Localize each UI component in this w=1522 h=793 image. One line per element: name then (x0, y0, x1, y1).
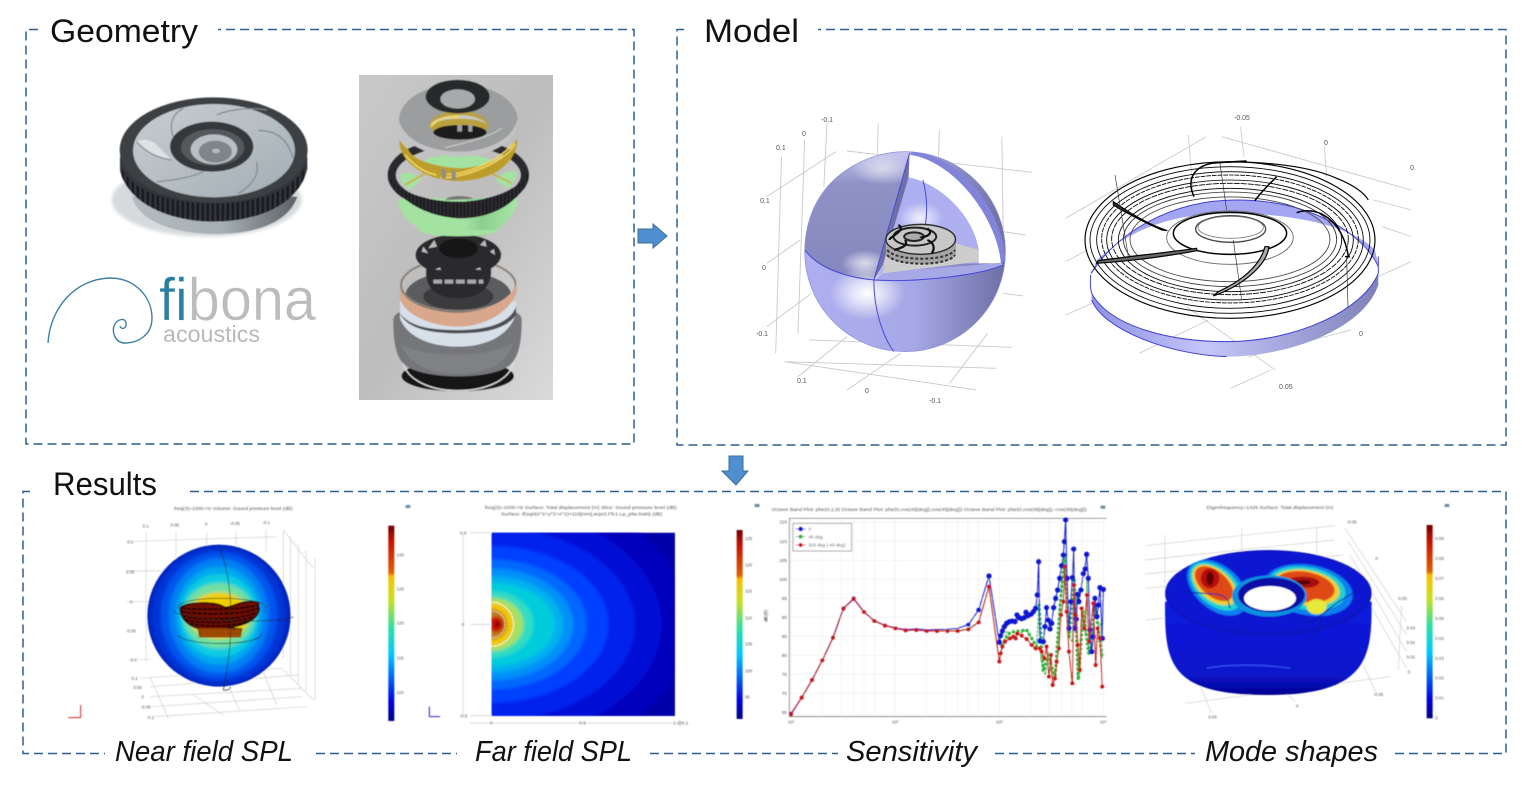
caption: sensitivity: Sensitivity (846, 736, 979, 768)
sensitivity y axis labels: 90 (782, 615, 787, 620)
mode shapes colorbar labels: 0.06 (1435, 596, 1444, 601)
sensitivity legend (793, 523, 852, 551)
chart: far field SPL (428, 503, 768, 726)
model: sphere axis labels: 0.1 (797, 378, 807, 385)
far field tick labels: 0.5 (460, 530, 467, 535)
far field title: freq(3)=1000 Hz Surface: Total displacement (m) Slice: Sound pressure level (dB) (485, 505, 677, 510)
far field axes (463, 533, 677, 723)
sensitivity x axis labels: 10² (892, 719, 899, 724)
mode shapes tick labels: 0.03 (1407, 625, 1416, 630)
geometry frame (26, 30, 634, 444)
mode shapes colorbar labels: 0.02 (1435, 676, 1444, 681)
far field triad (429, 707, 440, 717)
sensitivity x axis labels: 10⁴ (1100, 719, 1107, 724)
model frame (677, 30, 1506, 445)
upper stack (387, 80, 530, 239)
series: 0 markers (789, 517, 1106, 716)
sensitivity y axis labels (779, 519, 787, 715)
chart: mode shapes (1145, 504, 1449, 720)
near field tick labels: 0.05 (171, 523, 180, 528)
model: sphere axis labels: -0.1 (929, 398, 941, 405)
panel: results (23, 466, 1506, 768)
arrow: geometry to model (638, 224, 667, 248)
mode shapes colorbar labels: 0.09 (1435, 536, 1444, 541)
arrow: model to results (722, 456, 748, 485)
model: wireframe axis labels: -0.05 (1234, 115, 1250, 122)
far field colorbar (737, 530, 743, 719)
mode shapes tick labels: 0 (1296, 703, 1299, 708)
chart: sensitivity: dB (T) (764, 611, 768, 622)
model: wireframe axis labels: 0 (1359, 331, 1363, 338)
sensitivity y axis labels: 70 (782, 691, 787, 696)
model: sphere axis labels: -0.1 (756, 331, 768, 338)
heading: geometry: Geometry (50, 13, 198, 49)
chart: sensitivity (764, 506, 1107, 724)
near field title: freq(3)=1000 Hz Volume: Sound pressure level (dB) (174, 506, 293, 511)
mode shapes colorbar labels: 0.07 (1435, 576, 1444, 581)
sensitivity legend: 315 deg (-45 deg) (808, 543, 846, 548)
mode shapes title: Eigenfrequency=1426 Surface: Total displacement (m) (1207, 505, 1334, 510)
mode shapes tick labels (1208, 520, 1416, 720)
mode shapes tick labels: 0.01 (1407, 655, 1416, 660)
far field subtitle: Surface: if(sqrt(x^2+y^2+z^2)<115[mm],acpr2.Ffc1.Lp_pfar,NaN) (dB) (501, 511, 663, 516)
far field map (490, 532, 676, 717)
caption: near field SPL: Near field SPL (115, 736, 293, 768)
model: sphere axis labels: 0 (865, 388, 869, 395)
panel: model (677, 13, 1506, 445)
results frame (23, 492, 1506, 754)
series: 315 deg markers (789, 565, 1104, 716)
far field tick labels: 0.5 (579, 720, 586, 725)
image: exploded speaker (359, 75, 553, 400)
chart: near field SPL (68, 505, 410, 721)
far field tick labels: -0.5 (459, 714, 468, 719)
far field colorbar labels: 110 (745, 615, 752, 620)
far field colorbar labels: 95 (745, 695, 750, 700)
left hot spot (1186, 558, 1244, 617)
model: wireframe axis labels: 0. (1410, 165, 1416, 172)
near field colorbar labels: 120 (397, 621, 404, 626)
model: wireframe axis labels (1234, 115, 1416, 391)
sensitivity legend: 0 (808, 527, 811, 532)
mode shapes colorbar labels: 0 (1435, 715, 1438, 720)
sensitivity y axis labels: 105 (779, 558, 787, 563)
model: sphere axis labels: -0.1 (821, 117, 833, 124)
heading: results: Results (53, 466, 157, 502)
mode shapes colorbar labels: 0.04 (1435, 636, 1444, 641)
near field tick labels: 0.1 (143, 523, 149, 528)
model: wireframe axis labels: 0.05 (1279, 384, 1293, 391)
far field tick labels: 1 @0.1 (673, 720, 689, 725)
near field tick labels: -0.1 (147, 715, 155, 720)
near field tick labels: -0.1 (262, 520, 270, 525)
sensitivity x axis labels (788, 719, 1107, 724)
model: sphere domain (767, 123, 1032, 390)
sensitivity y axis labels: 110 (780, 539, 787, 544)
far field colorbar labels: 115 (745, 589, 752, 594)
near field tick labels: 0 (205, 522, 208, 527)
heading: model: Model (704, 13, 799, 49)
model: sphere axis labels: 0 (802, 131, 806, 138)
near field tick labels: 0.1 (132, 676, 138, 681)
series: 45 deg (791, 555, 1102, 714)
near field tick labels: -0.05 (141, 704, 151, 709)
sensitivity y axis labels: 85 (782, 634, 787, 639)
mode shapes grid (1145, 526, 1407, 713)
mode shapes disc (1165, 602, 1372, 695)
mode shapes tick labels: 0 (1375, 556, 1378, 561)
lower stack (393, 230, 522, 391)
near field tick labels: -0.05 (126, 628, 136, 633)
mode shapes colorbar labels: 0.08 (1435, 556, 1444, 561)
near field grid (127, 530, 315, 718)
series: 315 deg (791, 567, 1102, 714)
near field colorbar labels: 110 (397, 690, 404, 695)
logo: fibona acoustics (48, 266, 317, 347)
near field tick labels: 0.1 (127, 539, 134, 544)
near field colorbar labels: 115 (397, 655, 404, 660)
series: 0 (791, 520, 1103, 714)
near field tick labels (126, 520, 270, 720)
mode shapes torus and hole (1232, 575, 1307, 617)
mode shapes colorbar labels (1435, 536, 1444, 720)
model: sphere axis labels: 0 (762, 265, 766, 272)
model: sphere axis labels (756, 117, 941, 405)
sensitivity y axis labels: 100 (779, 577, 787, 582)
near field colorbar labels: 125 (397, 587, 404, 592)
model: wireframe grid (1066, 127, 1411, 388)
panel: geometry (26, 13, 634, 444)
caption: far field SPL: Far field SPL (475, 736, 632, 768)
sensitivity y axis labels: 65 (782, 710, 787, 715)
far field colorbar labels: 100 (745, 668, 753, 673)
near field sphere (145, 542, 293, 690)
series: 45 deg markers (1002, 555, 1102, 680)
mode shapes tick labels: -0.05 (1347, 520, 1357, 525)
near field tick labels: -0.1 (129, 657, 137, 662)
far field colorbar labels: 105 (745, 642, 753, 647)
sensitivity y axis labels: 80 (782, 653, 787, 658)
near field axis triad (68, 705, 81, 718)
image: assembled speaker (112, 97, 310, 237)
far field tick labels: 0 (462, 622, 465, 627)
sensitivity x axis labels: 10³ (996, 719, 1003, 724)
far field colorbar labels: 125 (745, 536, 753, 541)
sensitivity legend: 45 deg (808, 534, 823, 539)
near field tick labels: 0.05 (133, 685, 142, 690)
mode shapes tick labels: 0 (1408, 669, 1411, 674)
logo wordmark: fibona (159, 266, 317, 333)
model: wireframe axis labels: 0 (1324, 140, 1328, 147)
mode shapes colorbar labels: 0.05 (1435, 616, 1444, 621)
near field tick labels: 0 (141, 694, 144, 699)
near field tick labels: 0.05 (126, 569, 135, 574)
model: sphere axis labels: 0.1 (760, 198, 770, 205)
mode shapes colorbar labels: 0.01 (1435, 696, 1444, 701)
near field colorbar labels (397, 552, 404, 695)
model: sphere axis labels: 0.1 (776, 145, 786, 152)
far field colorbar labels (745, 536, 768, 700)
far field colorbar labels: dB (T) (763, 609, 768, 622)
far field tick labels: 0 (490, 720, 493, 725)
mode shapes tick labels: -0.05 (1373, 692, 1384, 697)
sensitivity y axis labels: 115 (780, 519, 787, 524)
mode shapes tick labels: 0.05 (1208, 715, 1217, 720)
logo spiral (48, 278, 152, 343)
mode shapes tick labels: 0.02 (1407, 640, 1416, 645)
far field colorbar labels: 120 (745, 562, 753, 567)
near field colorbar labels: 130 (397, 552, 404, 557)
near field colorbar (388, 526, 394, 721)
model: speaker wireframe (1085, 161, 1378, 357)
sensitivity y axis labels: 75 (782, 672, 787, 677)
sensitivity x axis labels: 10¹ (788, 719, 795, 724)
far field tick labels (459, 530, 689, 725)
near field speaker (180, 601, 259, 637)
caption: mode shapes: Mode shapes (1205, 736, 1378, 768)
mode shapes colorbar labels: 0.03 (1435, 656, 1444, 661)
sensitivity grid (789, 518, 1107, 717)
sensitivity y axis labels: 95 (782, 596, 787, 601)
mode shapes tick labels: 0.05 (1398, 596, 1407, 601)
logo subtitle: acoustics (163, 321, 260, 347)
mode shapes colorbar (1427, 525, 1433, 718)
near field tick labels: 0 (130, 599, 133, 604)
near field tick labels: -0.05 (230, 521, 240, 526)
right hot spot (1266, 562, 1354, 618)
sensitivity title: Octave Band Plot: pfar(0,1,0) Octave Band Plot: pfar(0,cos(45[deg]),cos(45[deg])) Octave Band Plot: pfar(0,cos(45[deg]),-cos(45[deg])) (772, 507, 1087, 512)
